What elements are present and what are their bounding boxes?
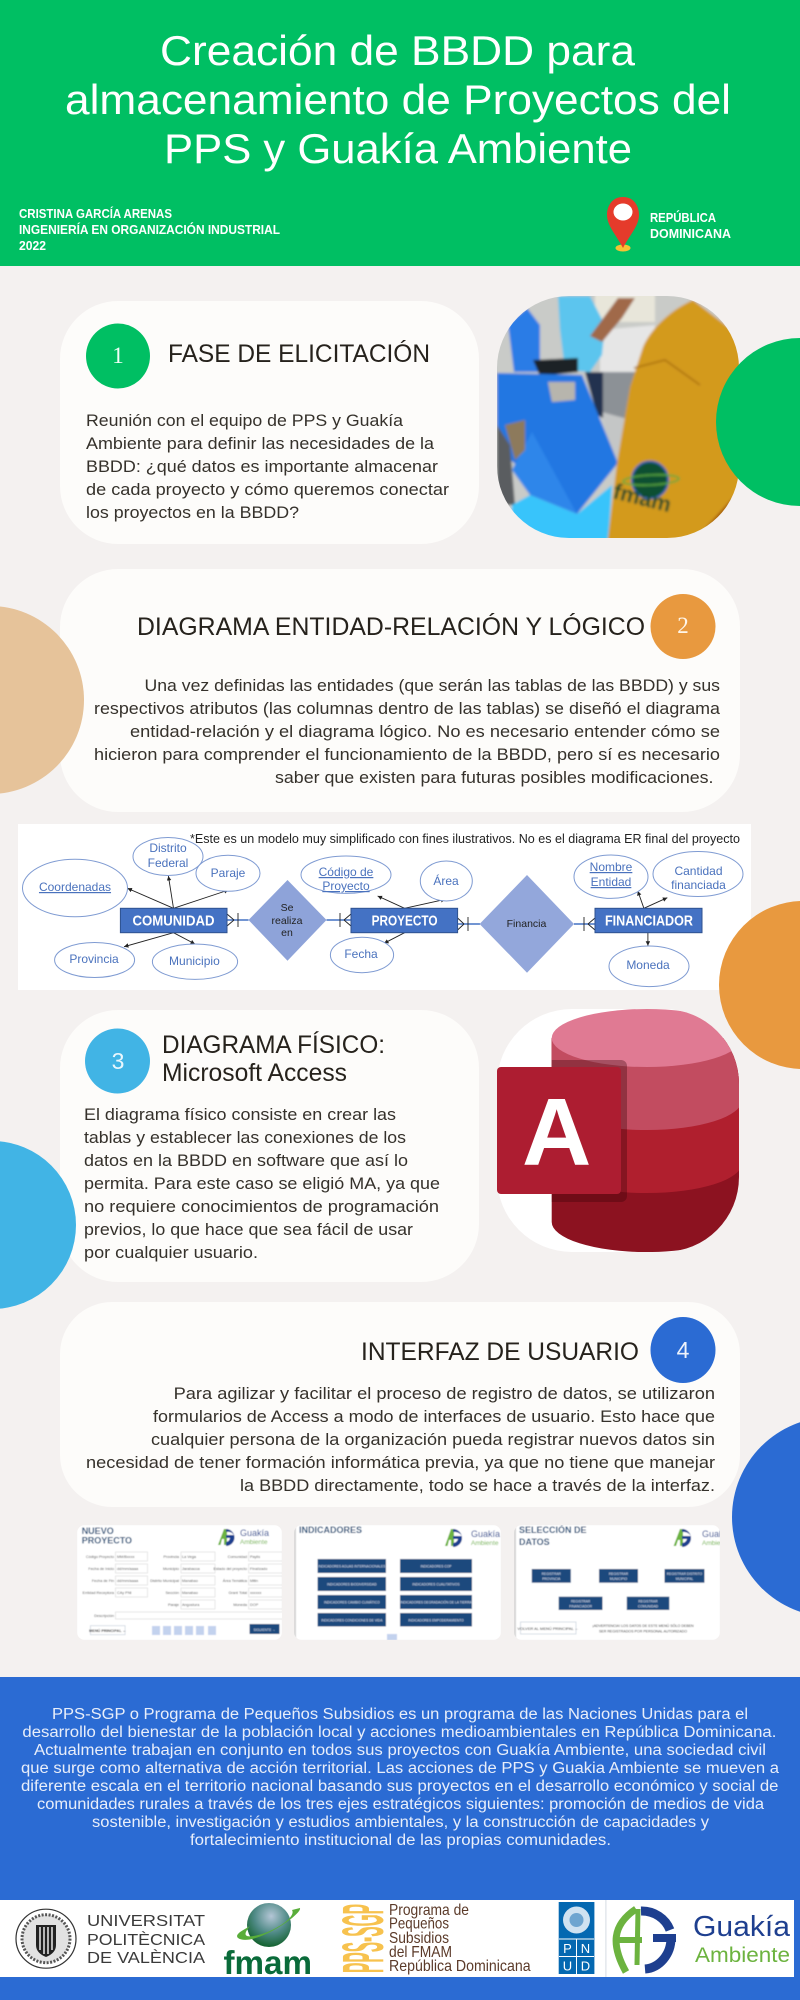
logo: Guakía Ambiente: Ambiente: [695, 1944, 790, 1967]
screenshot: nuevo proyecto form: [77, 1525, 284, 1640]
screenshot: selección de datos menu: MUNICIPAL: [676, 1577, 694, 1581]
title: almacenamiento de Proyectos del: [65, 76, 731, 123]
body text 1: [86, 411, 449, 522]
number badge 2: 2: [677, 613, 689, 638]
title: Creación de BBDD para: [160, 27, 636, 74]
author block: CRISTINA GARCÍA ARENAS: [19, 206, 172, 221]
heading 2: DIAGRAMA ENTIDAD-RELACIÓN Y LÓGICO: [137, 612, 645, 641]
icon: Microsoft Access logo: A: [522, 1079, 591, 1186]
logo: PPS-SGP: Pequeños: [389, 1916, 449, 1932]
screenshot: selección de datos menu: REGISTRAR: [542, 1572, 562, 1576]
number badge 1: [86, 324, 150, 388]
header band: [0, 0, 800, 266]
footer description text: que surge como alternativa de acción territorial. Las acciones de PPS y Guakia Ambiente se mueven a: [21, 1760, 779, 1777]
footer description text: [21, 1706, 779, 1849]
panel: diagrama entidad-relación y lógico: [60, 569, 740, 812]
logo: PNUD: D: [581, 1958, 590, 1974]
heading 3: [162, 1030, 385, 1087]
ER diagram: [18, 824, 751, 990]
screenshot: nuevo proyecto form: Manabao: [182, 1579, 198, 1583]
attribute labels: Provincia: [69, 952, 119, 966]
logos strip: [0, 1900, 794, 1981]
author block: [19, 206, 280, 253]
attribute labels: Nombre: [590, 860, 633, 874]
panel: diagrama físico: [60, 1010, 479, 1282]
body text 3: [84, 1105, 440, 1262]
screenshot: nuevo proyecto form: Guakía: [240, 1528, 269, 1538]
screenshot: nuevo proyecto form: xxxxxx: [250, 1591, 261, 1595]
screenshot: nuevo proyecto form: Paraje: [168, 1603, 179, 1607]
logo: PNUD: U: [563, 1958, 572, 1974]
screenshot: selección de datos menu: [514, 1524, 731, 1640]
author block: 2022: [19, 238, 46, 253]
screenshot: nuevo proyecto form: MENÚ PRINCIPAL ←: [89, 1628, 126, 1633]
number badge 4: [650, 1317, 716, 1383]
logo: PNUD: [559, 1902, 594, 1974]
heading 4: INTERFAZ DE USUARIO: [361, 1338, 639, 1366]
body text 4: necesidad de tener formación informática previa, ya que no tiene que manejar: [86, 1453, 715, 1472]
screenshot: nuevo proyecto form: Sección: [165, 1591, 179, 1595]
attribute labels: Cantidad: [674, 864, 723, 878]
attribute labels: Fecha: [344, 947, 378, 961]
screenshot: nuevo proyecto form: Entidad Receptora: [83, 1591, 115, 1595]
body text 2: saber que existen para futuras posibles modificaciones.: [275, 768, 714, 787]
decorative circle: orange right: [719, 901, 800, 1069]
panel: interfaz de usuario: [60, 1302, 740, 1507]
number badge 3: 3: [112, 1048, 124, 1074]
location label: [650, 210, 732, 241]
attribute labels: Distrito: [149, 841, 187, 855]
screenshot: selección de datos menu: DATOS: [519, 1537, 550, 1547]
screenshot: selección de datos menu: SELECCIÓN DE: [519, 1524, 587, 1535]
footer description text: Actualmente trabajan en conjunto en todos sus proyectos con Guakía Ambiente, una sociedad civil: [34, 1742, 766, 1759]
screenshot: nuevo proyecto form: MM/Bxxxx: [117, 1555, 135, 1559]
footer description text: sostenible, investigación y estudios ambientales, y la construcción de capacidades y: [92, 1814, 709, 1831]
footer description text: fortalecimiento institucional de las propias comunidades.: [190, 1832, 611, 1849]
heading 3: Microsoft Access: [162, 1059, 347, 1087]
attribute labels: [39, 841, 726, 972]
body text 4: Para agilizar y facilitar el proceso de registro de datos, se utilizaron: [174, 1384, 715, 1403]
screenshot: nuevo proyecto form: DOP: [250, 1603, 259, 1607]
body text 4: [86, 1384, 715, 1495]
screenshot: nuevo proyecto form: Jarabacoa: [182, 1567, 201, 1571]
body text 4: la BBDD directamente, todo se hace a través de la interfaz.: [240, 1476, 715, 1495]
screenshot: nuevo proyecto form: Finalizado: [250, 1567, 267, 1571]
heading 1: FASE DE ELICITACIÓN: [168, 339, 430, 368]
screenshot: nuevo proyecto form: CAy PNI: [117, 1591, 132, 1595]
screenshot: nuevo proyecto form: Fecha de Inicio: [88, 1567, 114, 1571]
screenshot: selección de datos menu: VOLVER AL MENÚ PRINCIPAL ←: [517, 1626, 579, 1631]
body text 3: por cualquier usuario.: [84, 1243, 258, 1262]
screenshot: nuevo proyecto form: Manabao: [182, 1591, 198, 1595]
logo: Guakía Ambiente: Guakía: [693, 1911, 791, 1943]
relationship diamonds: Financia: [507, 918, 546, 930]
attribute labels: Paraje: [211, 866, 246, 880]
decorative circle: blue right: [732, 1417, 800, 1617]
screenshot: indicadores menu: INDICADORES DEGRADACIÓN DE LA TIERRA: [400, 1600, 473, 1604]
icon: location pin: [607, 197, 639, 252]
title: PPS y Guakía Ambiente: [164, 125, 632, 172]
body text 1: Ambiente para definir las necesidades de la: [86, 434, 435, 453]
screenshot: indicadores menu: Guakía: [471, 1529, 500, 1539]
attribute labels: Moneda: [626, 958, 670, 972]
screenshot: nuevo proyecto form: NUEVO: [82, 1526, 114, 1536]
screenshot: indicadores menu: INDICADORES BIODIVERSIDAD: [327, 1582, 377, 1586]
attribute arrows: [124, 876, 667, 947]
attribute labels: Municipio: [169, 954, 220, 968]
screenshot: selección de datos menu: Guakía: [702, 1529, 731, 1539]
decorative circle: light blue left: [0, 1141, 76, 1309]
screenshot: selección de datos menu: REGISTRAR: [571, 1600, 591, 1604]
logo: PPS-SGP: Programa de: [389, 1902, 469, 1919]
screenshot: indicadores menu: INDICADORES COP: [421, 1564, 452, 1568]
screenshot: nuevo proyecto form: Provincia: [163, 1555, 180, 1559]
body text 4: formularios de Access a modo de interfaces de usuario. Esto hace que: [153, 1407, 715, 1426]
logo: PNUD: N: [581, 1941, 590, 1956]
screenshot: indicadores menu: INDICADORES CONDICIONES DE VIDA: [321, 1618, 383, 1622]
photo: technicians and fmam shirt: [497, 296, 739, 538]
body text 3: El diagrama físico consiste en crear las: [84, 1105, 396, 1124]
screenshot: selección de datos menu: COMUNIDAD: [638, 1604, 659, 1608]
author block: INGENIERÍA EN ORGANIZACIÓN INDUSTRIAL: [19, 222, 280, 237]
entity boxes: FINANCIADOR: [605, 912, 693, 930]
screenshot: nuevo proyecto form: Comunidad: [228, 1555, 247, 1559]
screenshot: selección de datos menu: MUNICIPIO: [610, 1577, 628, 1581]
logo: PNUD: P: [563, 1941, 572, 1956]
location label: REPÚBLICA: [650, 210, 717, 225]
footnote: *Este es un modelo muy simplificado con fines ilustrativos. No es el diagrama ER final del proyecto: [190, 831, 740, 846]
screenshot: nuevo proyecto form: Angostura: [182, 1603, 200, 1607]
screenshot: nuevo proyecto form: Distrito Municipal: [150, 1579, 179, 1583]
body text 3: datos en la BBDD en software que así lo: [84, 1151, 408, 1170]
decorative circle: green right: [716, 338, 800, 506]
entity boxes: COMUNIDAD: [132, 912, 215, 930]
screenshot: selección de datos menu: Ambiente: [702, 1540, 730, 1547]
icon: Microsoft Access logo: [497, 1009, 742, 1252]
body text 4: cualquier persona de la organización pueda registrar nuevos datos sin: [151, 1430, 715, 1449]
body text 3: permita. Para este caso se eligió MA, ya que: [84, 1174, 440, 1193]
title: [65, 27, 731, 172]
body text 2: entidad-relación y el diagrama lógico. No es necesario entender cómo se: [130, 722, 720, 741]
footer description text: diferente escala en el territorio nacional basando sus proyectos en el desarrollo económico y social de: [21, 1778, 778, 1795]
screenshot: selección de datos menu: REGISTRAR: [609, 1572, 629, 1576]
footer band: [0, 1677, 800, 2000]
footer band: PPS-SGP: [331, 1904, 396, 1973]
attribute labels: Código de: [319, 865, 374, 879]
relationship diamonds: en: [281, 927, 293, 939]
body text 1: Reunión con el equipo de PPS y Guakía: [86, 411, 404, 430]
screenshot: nuevo proyecto form: PROYECTO: [82, 1536, 132, 1546]
screenshot: selección de datos menu: REGISTRAR: [638, 1600, 658, 1604]
logo: Guakía Ambiente: [605, 1900, 791, 1977]
screenshot: nuevo proyecto form: Fecha de Fin: [92, 1579, 114, 1583]
location label: DOMINICANA: [650, 226, 732, 241]
attribute labels: Coordenadas: [39, 880, 111, 894]
screenshot: indicadores menu: Ambiente: [471, 1540, 499, 1547]
body text 1: los proyectos en la BBDD?: [86, 503, 299, 522]
logo: PPS-SGP: del FMAM: [389, 1944, 452, 1961]
logo: PPS-SGP: Subsidios: [389, 1930, 449, 1947]
screenshot: nuevo proyecto form: Paylis: [250, 1555, 260, 1559]
screenshot: indicadores menu: INDICADORES EMPODERAMIENTO: [408, 1618, 464, 1622]
screenshot: nuevo proyecto form: Descripción: [94, 1614, 114, 1618]
screenshot: indicadores menu: INDICADORES: [299, 1525, 362, 1535]
screenshot: selección de datos menu: SER REGISTRADOS POR PERSONAL AUTORIZADO: [599, 1630, 687, 1634]
body text 1: de cada proyecto y cómo queremos conectar: [86, 480, 449, 499]
body text 2: respectivos atributos (las columnas dentro de las tablas) se diseñó el diagrama: [94, 699, 721, 718]
entity boxes: PROYECTO: [372, 912, 438, 930]
logo: PPS-SGP: República Dominicana: [389, 1958, 531, 1975]
body text 3: previos, lo que hace que sea fácil de usar: [84, 1220, 413, 1239]
logo: UPV: UNIVERSITAT: [87, 1913, 205, 1930]
screenshot: nuevo proyecto form: Estado del proyecto: [213, 1567, 247, 1571]
attribute labels: Área: [433, 873, 459, 888]
entity boxes: [120, 908, 702, 933]
relationship diamonds: realiza: [272, 915, 303, 927]
body text 2: hicieron para comprender el funcionamiento de la BBDD, pero sí es necesario: [94, 745, 720, 764]
relationship diamonds: [248, 875, 574, 973]
screenshot: selección de datos menu: FINANCIADOR: [569, 1604, 593, 1608]
body text 2: [94, 676, 721, 787]
attribute labels: Federal: [148, 856, 188, 870]
number badge 4: 4: [677, 1337, 690, 1363]
logo: UPV: DE VALÈNCIA: [87, 1948, 205, 1967]
screenshot: nuevo proyecto form: dd/mm/aaaa: [117, 1567, 139, 1571]
screenshot: nuevo proyecto form: dd/mm/aaaa: [117, 1579, 139, 1583]
screenshot: selección de datos menu: PROVINCIA: [542, 1577, 561, 1581]
heading 3: DIAGRAMA FÍSICO:: [162, 1030, 385, 1059]
number badge 1: 1: [112, 343, 124, 368]
screenshot: nuevo proyecto form: Ambiente: [240, 1539, 268, 1546]
relationship diamonds: Se: [281, 902, 294, 914]
attribute labels: Entidad: [591, 875, 631, 889]
screenshot: indicadores menu: INDICADORES CUALITATIVOS: [412, 1582, 460, 1586]
screenshot: indicadores menu: INDICADORES CAMBIO CLIMÁTICO: [324, 1600, 380, 1604]
screenshot: indicadores menu: INDICADORES AGUAS INTERNACIONALES: [318, 1564, 386, 1568]
screenshot: indicadores menu: [294, 1525, 501, 1640]
screenshot: nuevo proyecto form: Mitin: [250, 1579, 258, 1583]
logo: fmam: [224, 1903, 312, 1981]
attribute ellipses: [22, 838, 743, 987]
body text 2: Una vez definidas las entidades (que serán las tablas de las BBDD) y sus: [144, 676, 720, 695]
attribute labels: financiada: [671, 878, 726, 892]
panel: fase de elicitación: [60, 301, 479, 544]
body text 1: BBDD: ¿qué datos es importante almacenar: [86, 457, 438, 476]
decorative circle: tan left: [0, 606, 84, 794]
body text 3: tablas y establecer las conexiones de los: [84, 1128, 406, 1147]
footer description text: comunidades rurales a través de los tres ejes estratégicos siguientes: promoción de medios de vida: [37, 1796, 764, 1813]
screenshot: nuevo proyecto form: Área Temática: [223, 1579, 248, 1583]
footer description text: PPS-SGP o Programa de Pequeños Subsidios es un programa de las Naciones Unidas para el: [52, 1706, 748, 1723]
body text 3: no requiere conocimientos de programación: [84, 1197, 439, 1216]
footer description text: desarrollo del bienestar de la población local y acciones medioambientales en República Dominicana.: [22, 1724, 776, 1741]
screenshot: nuevo proyecto form: Código Proyecto: [86, 1555, 114, 1559]
screenshot: nuevo proyecto form: Municipio: [163, 1567, 179, 1571]
logo: UPV: [16, 1909, 205, 1968]
screenshot: nuevo proyecto form: La Vega: [182, 1555, 197, 1559]
logo: PPS-SGP: [331, 1902, 531, 1975]
screenshot: selección de datos menu: ¡ADVERTENCIA! LOS DATOS DE ESTE MENÚ SÓLO DEBEN: [592, 1623, 694, 1628]
relationship connectors: [227, 913, 595, 931]
number badge 3: [85, 1028, 150, 1094]
attribute labels: Proyecto: [322, 879, 370, 893]
screenshot: nuevo proyecto form: SIGUIENTE →: [254, 1628, 275, 1632]
logo: UPV: POLITÈCNICA: [87, 1930, 205, 1949]
screenshot: selección de datos menu: REGISTRAR DISTRITO: [667, 1572, 703, 1576]
shirt logo text: fmam: [611, 479, 674, 517]
number badge 2: [650, 594, 716, 659]
logo: fmam: fmam: [224, 1944, 312, 1981]
screenshot: nuevo proyecto form: Grant Total: [228, 1591, 247, 1595]
screenshot: nuevo proyecto form: Moneda: [233, 1603, 248, 1607]
